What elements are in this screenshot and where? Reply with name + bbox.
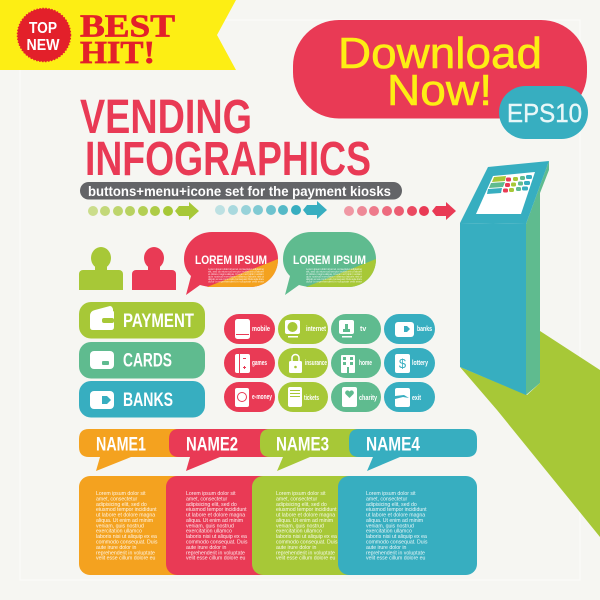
menu icon: internet: internet [306,326,327,333]
menu icon: lottery [384,348,435,378]
bubble body text: quis nostrud exercitation ullamco laboris nisi ut [208,274,264,278]
seal: top new: NEW [26,37,60,54]
button: payment: PAYMENT [123,311,194,332]
menu icon: charity: charity [359,395,377,402]
card: name3 text: aute irure dolor in [276,545,316,551]
card: name2 text [166,476,276,575]
bubble body text: Lorem ipsum dolor sit amet, consectetur adipisicing [208,267,264,271]
bubble body text: elit, sed do eiusmod tempor incididunt ut labore [306,270,362,274]
banner: best hit [0,0,236,70]
card: name1 text: eiusmod tempor incididunt [96,507,157,513]
menu icon: exit [384,382,435,412]
tab: name3: NAME3 [276,434,329,456]
bubble body text: et dolore magna aliqua. Ut enim ad minim veniam [306,272,362,276]
menu icon: lottery: lottery [412,360,428,367]
dotted arrow: green [88,202,199,220]
card: name3 text: adipisicing elit, sed do [276,502,327,508]
button: payment [79,302,205,338]
card: name2 text: aute irure dolor in [186,545,226,551]
card: name4 text: exercitation ullamco [366,529,412,535]
menu icon: exit: exit [412,395,421,402]
card: name2 text: commodo consequat. Duis [186,540,248,546]
download button: Now! [387,66,492,115]
card: name4 text: eiusmod tempor incididunt [366,507,427,513]
bubble body text: dolor in reprehenderit in voluptate velit esse [208,280,264,284]
seal: top new [18,8,70,62]
speech bubble: green [283,232,376,295]
card: name4 text: aute irure dolor in [366,545,406,551]
card: name2 text: laboris nisi ut aliquip ex ea [186,534,247,540]
subtitle bar: buttons+menu+icone set for the payment kiosks [88,183,391,199]
card: name4 text: velit esse cillum dolore eu [366,556,426,562]
card: name2 text: Lorem ipsum dolor sit [186,491,236,497]
kiosk [460,161,549,395]
card: name3 text: exercitation ullamco [276,529,322,535]
tab: name3 [260,429,360,471]
kiosk shadow [460,331,600,537]
card: name1 text: laboris nisi ut aliquip ex ea [96,534,157,540]
speech bubble: green: LOREM IPSUM [293,253,366,267]
dotted arrow: pink [344,202,456,220]
bubble body text: dolor in reprehenderit in voluptate velit esse [306,280,362,284]
card: name3 text: velit esse cillum dolore eu [276,556,336,562]
card: name4 text: ut labore et dolore magna [366,513,425,519]
menu icon: insurance: insurance [305,360,327,367]
button: banks [79,381,205,418]
card: name4 text: Lorem ipsum dolor sit [366,491,416,497]
card: name3 text [252,476,362,575]
card: name4 text [338,476,477,575]
card: name4 text: laboris nisi ut aliquip ex ea [366,534,427,540]
card: name1 text: commodo consequat. Duis [96,540,158,546]
card: name4 text: veniam, quis nostrud [366,523,414,529]
card: name1 text: Lorem ipsum dolor sit [96,491,146,497]
menu icon: lottery: $ [399,356,407,371]
menu icon: tickets [278,382,328,412]
menu icon: games: games [252,360,267,367]
menu icon: tickets: tickets [304,395,319,402]
menu icon: mobile: mobile [252,326,270,333]
card: name2 text: exercitation ullamco [186,529,232,535]
card: name3 text: ut labore et dolore magna [276,513,335,519]
bubble body text: quis nostrud exercitation ullamco laboris nisi ut [306,274,362,278]
tab: name2: NAME2 [186,434,238,456]
card: name3 text: Lorem ipsum dolor sit [276,491,326,497]
dotted arrow: blue [215,201,327,219]
banner heading: BEST [80,8,175,44]
icon: green person [79,247,123,290]
card: name1 text: velit esse cillum dolore eu [96,556,156,562]
bubble body text: et dolore magna aliqua. Ut enim ad minim veniam [208,272,264,276]
tab: name1: NAME1 [96,434,146,456]
tab: name1 [79,429,210,471]
button: cards [79,342,205,378]
card: name1 text: aliqua. Ut enim ad minim [96,518,153,524]
menu icon: e-money [224,382,275,412]
tab: name2 [169,429,300,471]
card: name3 text: reprehenderit in voluptate [276,550,335,556]
menu icon: home [331,348,381,378]
card: name1 text [79,476,189,575]
card: name1 text: veniam, quis nostrud [96,523,144,529]
card: name1 text: reprehenderit in voluptate [96,550,155,556]
card: name4 text: adipisicing elit, sed do [366,502,417,508]
icon: red person [132,247,176,290]
menu icon: games [224,348,275,378]
card: name2 text: eiusmod tempor incididunt [186,507,247,513]
seal: top new: TOP [29,20,57,37]
title [80,91,371,186]
card: name3 text: eiusmod tempor incididunt [276,507,337,513]
card: name2 text: veniam, quis nostrud [186,523,234,529]
button: cards: CARDS [123,350,172,372]
title: INFOGRAPHICS [85,133,371,186]
card: name1 text: aute irure dolor in [96,545,136,551]
menu icon: charity [331,382,381,412]
card: name2 text: amet, consectetur [186,496,228,502]
speech bubble: red: LOREM IPSUM [195,253,267,267]
card: name2 text: ut labore et dolore magna [186,513,245,519]
menu icon: banks [384,314,435,344]
menu icon: tv: tv [360,326,366,333]
menu icon: home: home [359,360,372,367]
menu icon: tv [331,314,381,344]
card: name3 text: aliqua. Ut enim ad minim [276,518,333,524]
card: name3 text: veniam, quis nostrud [276,523,324,529]
eps10 badge [499,86,588,139]
card: name2 text: aliqua. Ut enim ad minim [186,518,243,524]
card: name3 text: commodo consequat. Duis [276,540,338,546]
card: name3 text: laboris nisi ut aliquip ex ea [276,534,337,540]
tab: name4: NAME4 [366,434,420,456]
menu icon: internet [278,314,328,344]
card: name1 text: adipisicing elit, sed do [96,502,147,508]
card: name1 text: ut labore et dolore magna [96,513,155,519]
card: name1 text: amet, consectetur [96,496,138,502]
menu icon: banks: banks [417,326,432,333]
card: name4 text: reprehenderit in voluptate [366,550,425,556]
card: name2 text: velit esse cillum dolore eu [186,556,246,562]
bubble body text: aliquip ex ea commodo consequat. Duis aute irure [208,277,264,281]
download button [293,20,587,118]
bubble body text: aliquip ex ea commodo consequat. Duis aute irure [306,277,362,281]
card: name4 text: amet, consectetur [366,496,408,502]
title: VENDING [80,91,252,144]
bubble body text: Lorem ipsum dolor sit amet, consectetur adipisicing [306,267,362,271]
card: name2 text: reprehenderit in voluptate [186,550,245,556]
kiosk screen [476,172,535,214]
menu icon: e-money: e-money [252,394,272,401]
tab: name4 [349,429,477,471]
download button: Download [338,29,542,78]
bubble body text: elit, sed do eiusmod tempor incididunt ut labore [208,270,264,274]
card: name4 text: aliqua. Ut enim ad minim [366,518,423,524]
menu icon: insurance [278,348,328,378]
card: name4 text: commodo consequat. Duis [366,540,428,546]
eps10 badge: EPS10 [507,98,582,128]
banner heading: HIT! [80,34,155,70]
card: name1 text: exercitation ullamco [96,529,142,535]
card: name2 text: adipisicing elit, sed do [186,502,237,508]
button: banks: BANKS [123,390,173,411]
card: name3 text: amet, consectetur [276,496,318,502]
menu icon: mobile [224,314,275,344]
speech bubble: red [184,232,278,295]
